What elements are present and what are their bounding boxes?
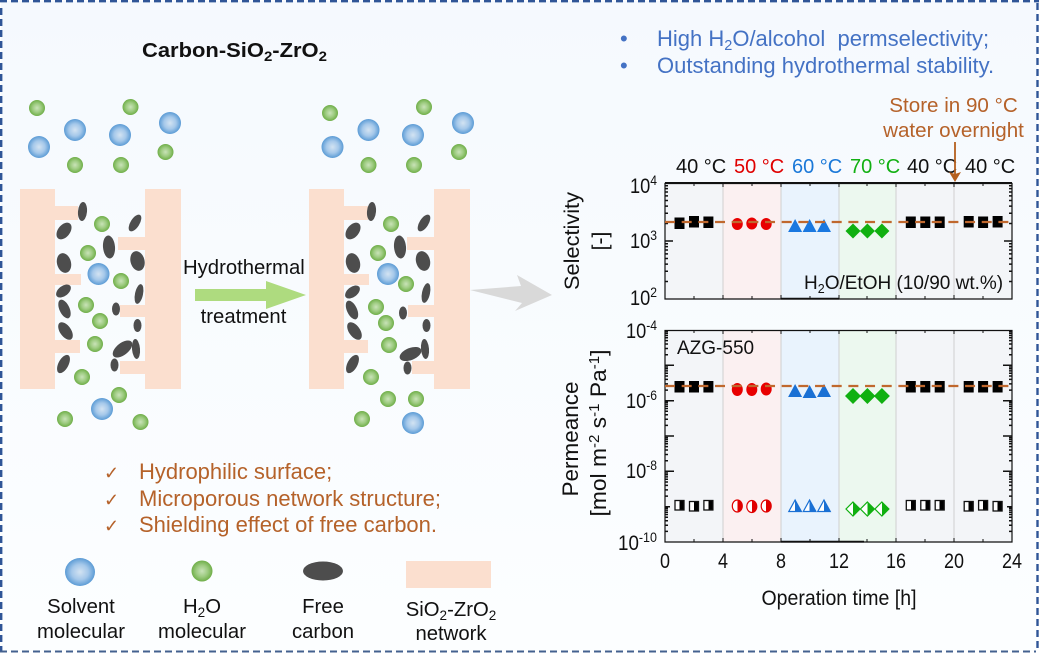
annotation: store in water	[882, 94, 1024, 142]
arrow: to charts	[470, 275, 552, 311]
y axis tick labels: 3	[650, 227, 657, 243]
legend: network: -ZrO	[447, 599, 489, 621]
legend: water: molecular	[158, 621, 246, 643]
label: hydrothermal: Hydrothermal	[183, 257, 305, 279]
x axis tick labels: 16	[886, 550, 906, 573]
property: shielding: ✓	[104, 516, 119, 536]
temperature labels: 70 °C	[850, 156, 900, 178]
y axis title: [-]	[589, 232, 612, 250]
mixture label: O/EtOH (10/90 wt.%)	[825, 273, 1003, 294]
y axis title	[558, 350, 611, 516]
solvent molecules	[28, 112, 181, 420]
dashed trend line	[665, 385, 1012, 387]
legend: water: H	[183, 596, 198, 618]
temperature labels: 40 °C	[907, 156, 957, 178]
y axis tick labels: 10	[630, 287, 653, 310]
arrow: hydrothermal treatment	[195, 281, 306, 309]
property: microporous: Microporous network structure;	[139, 486, 441, 511]
y axis title: [mol m	[586, 450, 611, 516]
x axis tick labels: 4	[718, 550, 728, 573]
water molecules	[322, 99, 467, 427]
y axis title: Pa	[586, 368, 611, 404]
x axis tick labels: 8	[776, 550, 786, 573]
property: microporous: ✓	[104, 490, 119, 510]
y axis tick labels: -4	[646, 317, 657, 333]
temperature labels: 40 °C	[676, 156, 726, 178]
highlight: permselectivity: High H	[657, 26, 724, 51]
label: treatment: treatment	[201, 306, 287, 328]
water permeance markers	[674, 381, 1003, 404]
title: 2	[264, 48, 273, 64]
dashed trend line	[665, 221, 1012, 223]
y axis tick labels: 4	[650, 172, 657, 188]
y axis tick labels	[630, 172, 657, 310]
silica-zirconia walls	[20, 189, 181, 389]
y axis title: -1	[587, 356, 603, 369]
legend	[37, 558, 496, 645]
silica-zirconia walls	[309, 189, 470, 389]
x axis tick labels: 24	[1002, 550, 1022, 573]
key properties	[104, 459, 441, 537]
solvent molecules	[322, 112, 474, 434]
highlights	[620, 26, 994, 78]
chart: permeance	[558, 317, 1022, 610]
x axis title: Operation time [h]	[762, 587, 916, 610]
legend: network	[406, 561, 496, 645]
y axis tick labels: 10	[626, 390, 649, 413]
highlight: permselectivity: O/alcohol permselectivity;	[732, 26, 989, 51]
y axis title: -1	[587, 404, 603, 417]
y axis title: Permeance	[558, 382, 583, 496]
temperature labels: 40 °C	[965, 156, 1015, 178]
membrane label: AZG-550	[677, 338, 754, 359]
x axis tick labels: 12	[829, 550, 849, 573]
legend: network: network	[415, 623, 487, 645]
free carbon particles	[53, 202, 147, 375]
y axis tick labels: 10	[630, 175, 653, 198]
legend: network: SiO	[406, 599, 440, 621]
y axis tick labels: -6	[646, 387, 657, 403]
y axis title: s	[586, 417, 611, 435]
legend: water	[158, 560, 246, 643]
x axis tick labels	[660, 550, 1022, 573]
temperature labels	[676, 156, 1015, 178]
legend: solvent	[37, 558, 125, 643]
membrane diagram: after treatment	[309, 99, 474, 434]
legend: solvent: Solvent	[47, 596, 115, 618]
legend: network: 2	[440, 608, 447, 623]
title: -ZrO	[272, 39, 319, 62]
highlight: permselectivity: •	[620, 26, 628, 51]
chart: selectivity	[560, 172, 1012, 310]
markers	[674, 216, 1003, 238]
y axis tick labels: 10	[618, 532, 641, 555]
y axis title	[560, 192, 612, 290]
legend: free carbon: Free	[302, 596, 344, 618]
property: shielding: Shielding effect of free carbon.	[139, 512, 437, 537]
temperature labels: 60 °C	[792, 156, 842, 178]
y axis tick labels: 10	[630, 230, 653, 253]
highlight: stability: Outstanding hydrothermal stability.	[657, 53, 994, 78]
x axis tick labels: 20	[944, 550, 964, 573]
y axis tick labels	[618, 317, 657, 555]
temperature bands	[665, 330, 1012, 542]
temperature bands	[665, 183, 1012, 299]
y axis tick labels: 10	[626, 460, 649, 483]
legend: free carbon: carbon	[292, 621, 354, 643]
mixture label: 2	[818, 282, 825, 296]
title: 2	[319, 48, 327, 64]
ethanol permeance markers	[675, 500, 1002, 516]
y axis tick labels: -8	[646, 457, 657, 473]
highlight: permselectivity: 2	[724, 38, 732, 54]
y axis tick labels: 10	[626, 320, 649, 343]
legend: water: O	[205, 596, 221, 618]
mixture label: H	[804, 273, 818, 294]
legend: network: 2	[489, 608, 496, 623]
title: Carbon-SiO	[142, 39, 256, 62]
y axis title: ]	[586, 350, 611, 356]
legend: free carbon	[292, 562, 354, 643]
annotation: store in water: Store in 90 °C	[889, 94, 1018, 117]
y axis tick labels: 2	[650, 284, 657, 300]
free carbon particles	[342, 202, 433, 375]
y axis tick labels: -10	[639, 529, 657, 545]
annotation: store in water: water overnight	[882, 119, 1024, 142]
temperature labels: 50 °C	[734, 156, 784, 178]
legend: solvent: molecular	[37, 621, 125, 643]
highlight: stability: •	[620, 53, 628, 78]
membrane diagram: before treatment	[20, 99, 181, 430]
y axis title: -2	[587, 435, 603, 448]
water molecules	[29, 99, 174, 430]
legend: water: 2	[198, 605, 205, 620]
property: hydrophilic: Hydrophilic surface;	[139, 459, 332, 484]
x axis tick labels: 0	[660, 550, 670, 573]
property: hydrophilic: ✓	[104, 463, 119, 483]
y axis title: Selectivity	[560, 192, 584, 290]
arrow: store event	[949, 142, 961, 182]
